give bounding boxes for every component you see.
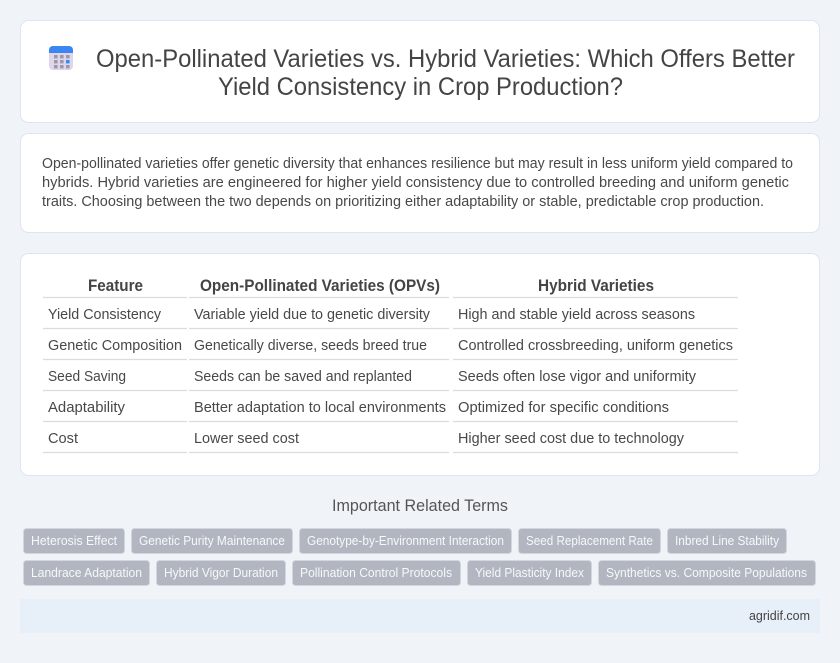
row: genetic composition: Controlled crossbreeding, uniform genetics bbox=[458, 338, 733, 354]
row: seed saving: Seeds often lose vigor and uniformity bbox=[458, 369, 697, 385]
row: seed saving: Seed Saving bbox=[48, 369, 126, 385]
tags: related terms: Seed Replacement Rate bbox=[526, 534, 653, 548]
tags: related terms: Yield Plasticity Index bbox=[475, 566, 585, 580]
tags: related terms: Genotype-by-Environment Interaction bbox=[307, 534, 504, 548]
row: cost: Cost bbox=[48, 431, 78, 447]
title bbox=[96, 46, 795, 101]
row: adaptability bbox=[48, 400, 669, 416]
row: adaptability: Better adaptation to local environments bbox=[194, 400, 446, 416]
tags: related terms: Pollination Control Protocols bbox=[300, 566, 452, 580]
panel: summary paragraph: Open-pollinated varieties offer genetic diversity that enhances resilience but may result in less uniform yield compared to bbox=[42, 156, 793, 172]
row: yield consistency bbox=[48, 307, 695, 323]
panel: summary paragraph: hybrids. Hybrid varieties are engineered for higher yield consistency due to controlled breeding and uniform genetic bbox=[42, 175, 790, 191]
panel: summary paragraph bbox=[20, 134, 820, 232]
table header: Open-Pollinated Varieties (OPVs) bbox=[200, 277, 440, 295]
panel: summary paragraph: traits. Choosing between the two depends on prioritizing either adaptability or stable, predictable crop production. bbox=[42, 194, 764, 210]
row: yield consistency: Variable yield due to genetic diversity bbox=[194, 307, 431, 323]
row: yield consistency: High and stable yield across seasons bbox=[458, 307, 695, 323]
heading: related terms: Important Related Terms bbox=[332, 497, 508, 515]
footer: agridif.com bbox=[749, 608, 810, 623]
row: seed saving bbox=[48, 369, 697, 385]
tags: related terms: Landrace Adaptation bbox=[31, 566, 142, 580]
row: genetic composition bbox=[48, 338, 733, 354]
table header: Hybrid Varieties bbox=[538, 277, 654, 295]
footer bbox=[20, 599, 820, 633]
row: cost: Lower seed cost bbox=[194, 431, 299, 447]
tags: related terms bbox=[24, 528, 816, 586]
table header bbox=[88, 277, 654, 295]
tags: related terms: Heterosis Effect bbox=[31, 534, 117, 548]
tags: related terms: Genetic Purity Maintenance bbox=[139, 534, 285, 548]
title: Yield Consistency in Crop Production? bbox=[218, 74, 623, 101]
row: adaptability: Optimized for specific conditions bbox=[458, 400, 669, 416]
table header: Feature bbox=[88, 277, 143, 295]
row: seed saving: Seeds can be saved and replanted bbox=[194, 369, 412, 385]
row: genetic composition: Genetic Composition bbox=[48, 338, 182, 354]
row: cost: Higher seed cost due to technology bbox=[458, 431, 685, 447]
tags: related terms: Synthetics vs. Composite Populations bbox=[606, 566, 807, 580]
row: yield consistency: Yield Consistency bbox=[48, 307, 162, 323]
icon: calendar bbox=[49, 46, 73, 70]
row: adaptability: Adaptability bbox=[48, 400, 126, 416]
title: Open-Pollinated Varieties vs. Hybrid Varieties: Which Offers Better bbox=[96, 46, 795, 73]
row: genetic composition: Genetically diverse, seeds breed true bbox=[194, 338, 427, 354]
tags: related terms: Inbred Line Stability bbox=[675, 534, 780, 548]
panel: title card bbox=[20, 20, 820, 122]
row: cost bbox=[48, 431, 685, 447]
tags: related terms: Hybrid Vigor Duration bbox=[164, 566, 278, 580]
panel: comparison table bbox=[20, 254, 820, 476]
